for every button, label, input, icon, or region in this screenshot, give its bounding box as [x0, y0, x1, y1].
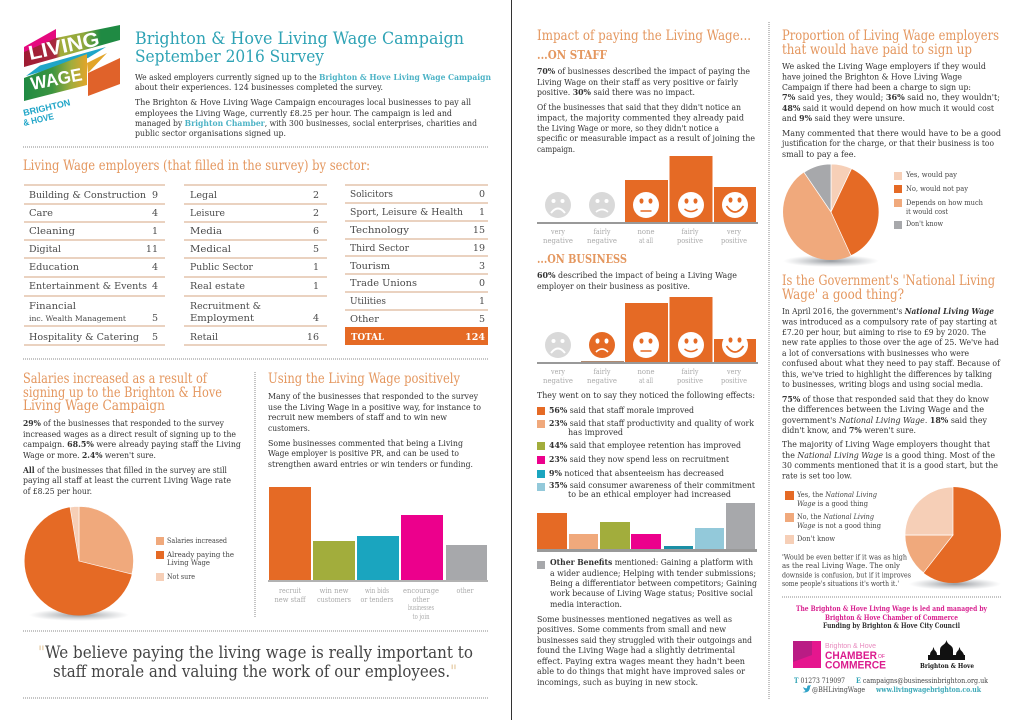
bar chart: impact on staff	[537, 156, 758, 245]
table: sectors column 2: 2	[313, 190, 319, 201]
text block: positive use body: customers.	[268, 423, 310, 433]
text block: national living wage body: In April 2016, the government's National Living Wage	[782, 306, 994, 316]
text block: other benefits: Other Benefits mentioned: Gaining a platform with	[550, 557, 754, 567]
text block: other benefits: work because of Living Wage status; Positive social	[550, 588, 753, 598]
table: sectors column 2: Media	[190, 226, 222, 237]
icon: fairly positive face, business	[678, 332, 704, 358]
legend: salaries pie: Salaries increased	[167, 536, 227, 545]
legend: effects list: 23% said they now spend less on recruitment	[549, 454, 730, 464]
heading: national living wage	[782, 273, 995, 303]
legend: effects list: to be an ethical employer had increased	[568, 489, 732, 499]
text block: proportion body: We asked the Living Wage employers if they would	[782, 61, 987, 71]
panel: national living wage	[782, 273, 1001, 590]
icon: very positive face	[722, 192, 748, 218]
text block: negatives	[537, 614, 753, 687]
icon: Chamber of Commerce logo: Brighton & Hove	[825, 643, 876, 650]
text block: national living wage body: was introduced as a compulsory rate of pay starting at	[782, 316, 998, 326]
text block: salaries body: of £8.25 per hour.	[23, 486, 92, 496]
text block: positive use body	[268, 391, 481, 469]
text block: positive use body: use the Living Wage in a positive way, for instance to	[268, 402, 481, 412]
text block: introduction: managed by Brighton Chamber, with 300 businesses, social enterprises, charities and	[135, 118, 478, 128]
legend: would pay: No, would not pay	[906, 184, 969, 193]
table: sectors column 1: 4	[152, 262, 158, 273]
heading: positive use: Using the Living Wage positively	[268, 371, 460, 387]
table: sectors column 2: 16	[307, 332, 319, 343]
icon: Brighton & Hove pavilion logo: Brighton & Hove	[920, 662, 974, 670]
table: sectors column 2: Medical	[190, 244, 231, 255]
icon: Living Wage logo	[22, 25, 120, 128]
text block: national living wage body: the National Living Wage is a good thing. Most of the	[782, 450, 995, 460]
text block: national living wage body: The majority of Living Wage employers thought that	[782, 439, 991, 449]
legend: effects list: 56% said that staff morale improved	[549, 405, 695, 415]
text block: positive use body: recruit new members of staff and to win new	[268, 412, 448, 422]
text block: national living wage body: to businesses, writing blogs and using social media.	[782, 379, 983, 389]
legend: national living wage: Wage is not a good thing	[797, 521, 881, 530]
legend: national living wage	[785, 490, 881, 544]
text block: national living wage body: new rate applies to those over the age of 25. We've had	[782, 337, 1000, 347]
icon: fairly negative face, business	[589, 332, 615, 358]
table: sectors column 2	[184, 185, 327, 345]
text block: on staff	[537, 66, 755, 154]
text block: salaries body: campaign. 68.5% were already paying staff the Living	[23, 439, 242, 449]
icon: Brighton & Hove pavilion logo	[920, 640, 974, 670]
bar chart: impact on staff: positive	[677, 236, 703, 245]
text block: proportion body: Many commented that there would have to be a good	[782, 128, 1002, 138]
text block: proportion body: and 9% said they were unsure.	[782, 113, 905, 123]
text block: on business: 60% described the impact of being a Living Wage	[537, 270, 737, 280]
heading: salaries: Salaries increased as a result of	[23, 371, 208, 387]
footer: credits: Brighton & Hove Chamber of Commerce	[825, 613, 958, 622]
table: sectors column 2: Recruitment &	[190, 301, 261, 312]
text block: positive use body: strengthen award entries or win tenders or funding.	[268, 459, 473, 469]
text block: proportion body: 7% said yes, they would; 36% said no, they wouldn't;	[782, 92, 1000, 102]
bar chart: impact on business: at all	[639, 376, 653, 385]
icon: very positive face, business	[722, 332, 748, 358]
panel: using the Living Wage positively	[268, 371, 488, 621]
text block: negatives: found the Living Wage had a slightly detrimental	[537, 645, 735, 655]
text block: on business: employer on their business as positive.	[537, 281, 690, 291]
text block: national living wage body	[782, 306, 1001, 480]
bar chart: effects	[537, 503, 757, 552]
text block: introduction: We asked employers currently signed up to the Brighton & Hove Living Wage Campaign	[135, 72, 491, 82]
panel: impact of paying the Living Wage	[537, 28, 758, 687]
callout: comment quote: some people's situations it's worth it.'	[782, 579, 899, 588]
text block: on staff: the Living Wage or more, so they didn't notice a	[537, 123, 719, 133]
heading: national living wage: Wage' a good thing?	[782, 287, 904, 303]
icon: Chamber of Commerce logo	[793, 641, 886, 672]
table: sectors column 3: 15	[473, 225, 485, 236]
text block: positive use body: Some businesses commented that being a Living	[268, 438, 464, 448]
table: sectors column 3: Trade Unions	[350, 278, 417, 289]
bar chart: positive use: other	[456, 586, 474, 595]
callout: comment quote: downside is confusion, but if it improves	[782, 570, 911, 580]
text block: on staff: Living Wage on their staff as very positive or fairly	[537, 77, 738, 87]
bar chart: positive use: other	[412, 595, 430, 604]
icon: Chamber of Commerce logo: OF	[878, 654, 885, 660]
text block: proportion body: Campaign if there had been a charge to sign up:	[782, 82, 971, 92]
table: sectors column 3: Technology	[350, 225, 410, 236]
icon: neutral face, business	[633, 332, 659, 358]
text block: negatives: Some businesses mentioned negatives as well as	[537, 614, 732, 624]
table: sectors column 3: Sport, Leisure & Health	[350, 207, 463, 218]
icon: Living Wage logo: WAGE	[29, 64, 84, 94]
text block: national living wage body: 30 comments mentioned that it is a good start, but the	[782, 460, 998, 470]
legend: national living wage: No, the National Living	[797, 512, 874, 521]
table: sectors column 3: Solicitors	[350, 189, 393, 200]
text block: positive use body: Wage employer is positive PR, and can be used to	[268, 448, 459, 458]
panel: salaries increased	[22, 371, 242, 621]
bar chart: impact on staff: at all	[639, 236, 653, 245]
table: sectors column 1: Building & Construction	[29, 190, 146, 201]
heading: salaries	[23, 371, 222, 414]
table: sectors column 1: 5	[152, 313, 158, 324]
text block: negatives: positives. Some comments from small and new	[537, 624, 727, 634]
icon: Living Wage logo: BRIGHTON	[22, 97, 71, 118]
text block: proportion body: small to pay a fee.	[782, 149, 856, 159]
table: sectors column 3: 124	[465, 332, 485, 343]
text block: negatives: incomings, such as buying in new stock.	[537, 677, 698, 687]
table: sectors column 2: 6	[313, 226, 319, 237]
bar chart: impact on business	[537, 297, 758, 385]
title: September 2016 Survey	[135, 47, 324, 67]
bar chart: impact on business: none	[638, 367, 655, 376]
legend: would pay: Yes, would pay	[905, 170, 958, 179]
text block: salaries body: Wage or more. 2.4% weren't sure.	[23, 450, 156, 460]
legend: effects list: 23% said that staff productivity and quality of work	[549, 418, 755, 428]
table: sectors column 2: 2	[313, 208, 319, 219]
icon: neutral face	[633, 192, 659, 218]
footer: contact details: E campaigns@businessinbrighton.org.uk	[856, 676, 988, 685]
icon: very negative face, business	[545, 332, 571, 358]
legend: effects list: 35% said consumer awareness of their commitment	[549, 480, 756, 490]
table: sectors column 1: 5	[152, 332, 158, 343]
bar chart: impact on staff: positive	[721, 236, 747, 245]
table: sectors column 3: Other	[350, 314, 379, 325]
table: sectors column 1: Education	[29, 262, 79, 273]
icon: fairly negative face	[589, 192, 615, 218]
text block: on staff: 70% of businesses described the impact of paying the	[537, 66, 750, 76]
text block: on staff: specific or measurable impact as a result of joining the	[537, 133, 755, 143]
bar chart: impact on staff: fairly	[682, 227, 699, 236]
text block: national living wage body: a lot of conversations with businesses who were	[782, 348, 969, 358]
bar chart: impact on staff: none	[638, 227, 655, 236]
legend: effects list: 9% noticed that absenteeism has decreased	[549, 468, 725, 478]
icon: Chamber of Commerce logo: COMMERCE	[825, 660, 886, 672]
panel: proportion that would have paid	[781, 28, 1002, 267]
text block: national living wage body: government's National Living Wage. 18% said they	[782, 415, 987, 425]
legend: would pay: Depends on how much	[906, 198, 983, 207]
text block: national living wage body: rate is set too low.	[782, 470, 852, 480]
text block: negatives: effect. Paying extra wages meant they hadn't been	[537, 656, 746, 666]
text block: introduction: employees the Living Wage, currently £8.25 per hour. The campaign is led and	[135, 108, 453, 118]
table: sectors column 3: 0	[479, 189, 485, 200]
text block: introduction: public sector organisations signed up.	[135, 128, 286, 138]
table: sectors column 2: Employment	[190, 313, 254, 324]
table: sectors column 2: Legal	[190, 190, 217, 201]
table: sectors column 1: 4	[152, 281, 158, 292]
heading: salaries: signing up to the Brighton & Hove	[23, 385, 222, 401]
table: sectors column 2: 5	[313, 244, 319, 255]
bar chart: impact on business: fairly	[594, 367, 611, 376]
bar chart: impact on staff: very	[550, 227, 566, 236]
table: sectors column 1: Financial	[29, 301, 76, 312]
callout: employer quote	[38, 643, 473, 682]
table: sectors column 3: 5	[479, 314, 485, 325]
bar chart: positive use	[268, 487, 488, 621]
text block: negatives: able to do things that might have improved sales or	[537, 666, 745, 676]
table: sectors column 1: Digital	[29, 244, 61, 255]
bar chart: impact on staff: very	[726, 227, 742, 236]
text block: on staff: positive. 30% said there was no impact.	[537, 87, 695, 97]
pie chart: would pay	[783, 164, 879, 267]
table: sectors column 2: 4	[313, 313, 319, 324]
text block: on staff: Of the businesses that said that they didn't notice an	[537, 102, 742, 112]
table: sectors column 3: 1	[479, 296, 485, 307]
text block: effects intro: They went on to say they noticed the following effects:	[537, 390, 755, 400]
bar chart: impact on business: positive	[677, 376, 703, 385]
text block: proportion body: 48% said it would depend on how much it would cost	[782, 103, 995, 113]
icon: Living Wage logo: & HOVE	[22, 111, 55, 128]
bar chart: positive use: customers	[317, 595, 351, 604]
table: sectors column 3: 3	[479, 261, 485, 272]
heading: salaries: Living Wage Campaign	[23, 398, 165, 414]
icon: fairly positive face	[678, 192, 704, 218]
footer: credits: Funding by Brighton & Hove City Council	[823, 621, 960, 630]
table: sectors column 2: 1	[313, 281, 319, 292]
table: sectors column 1: Hospitality & Catering	[29, 332, 139, 343]
text block: on staff: impact, the majority commented they already paid	[537, 112, 745, 122]
bar chart: positive use: businesses	[408, 603, 434, 612]
table: sectors column 2: 1	[313, 262, 319, 273]
text block: on staff: campaign.	[537, 144, 575, 154]
legend: national living wage: Yes, the National Living	[796, 490, 877, 499]
table: sectors column 1: 11	[146, 244, 158, 255]
text block: national living wage body: this, we've tried to highlight the differences by talking	[782, 369, 993, 379]
bar chart: impact on business: very	[726, 367, 742, 376]
heading: proportion	[782, 28, 999, 58]
footer: credits	[796, 604, 988, 630]
table: sectors column 3: Third Sector	[350, 243, 409, 254]
text block: national living wage body: confused about what they need to pay staff. Because of	[782, 358, 1001, 368]
legend: salaries pie: Not sure	[167, 572, 195, 581]
table: sectors column 2: Public Sector	[190, 262, 253, 273]
bar chart: impact on business: negative	[543, 376, 574, 385]
legend: would pay: it would cost	[906, 207, 948, 216]
pie chart: national living wage	[905, 487, 1001, 590]
text block: salaries body: 29% of the businesses that responded to the survey	[23, 418, 224, 428]
bar chart: impact on staff: negative	[587, 236, 618, 245]
bar chart: positive use: recruit	[279, 586, 301, 595]
legend: would pay: Don't know	[906, 219, 943, 228]
text block: on business	[537, 270, 737, 291]
bar chart: positive use: win new	[320, 586, 349, 595]
legend: would pay	[894, 170, 983, 229]
bar chart: impact on business: negative	[587, 376, 618, 385]
legend: salaries pie: Already paying the	[166, 550, 235, 559]
heading: sector table: Living Wage employers (that filled in the survey) by sector:	[23, 158, 370, 174]
text block: proportion body	[781, 61, 1002, 159]
text block: national living wage body: the differences between the Living Wage and the	[782, 404, 984, 414]
text block: positive use body: Many of the businesses that responded to the survey	[268, 391, 478, 401]
legend: salaries pie	[156, 536, 235, 581]
title	[135, 29, 464, 67]
table: sectors column 1: Entertainment & Events	[29, 281, 147, 292]
table: sectors column 1: inc. Wealth Management	[29, 314, 126, 323]
table: sectors column 1: 1	[152, 226, 158, 237]
legend: national living wage: Don't know	[797, 534, 836, 543]
text block: national living wage body: didn't know, and 7% weren't sure.	[782, 425, 916, 435]
title: Brighton & Hove Living Wage Campaign	[135, 29, 464, 49]
text block: salaries body: All of the businesses that filled in the survey are still	[22, 465, 227, 475]
footer: contact details	[794, 676, 988, 694]
text block: other benefits	[537, 557, 758, 609]
text block: proportion body: have joined the Brighton & Hove Living Wage	[782, 72, 962, 82]
callout: comment quote	[782, 552, 911, 588]
text block: salaries body: increased wages as a direct result of signing up to the	[23, 429, 236, 439]
bar chart: positive use: to join	[412, 612, 430, 621]
bar chart: impact on business: fairly	[682, 367, 699, 376]
table: sectors column 1: Care	[29, 208, 53, 219]
bar chart: positive use: new staff	[274, 595, 306, 604]
legend: effects list	[537, 405, 756, 499]
table: sectors column 1: 4	[152, 208, 158, 219]
legend: effects list: 44% said that employee retention has improved	[549, 440, 742, 450]
bar chart: positive use: encourage	[403, 586, 439, 595]
icon: Living Wage logo: LIVING	[26, 28, 101, 65]
table: sectors column 3: Tourism	[350, 261, 390, 272]
footer: contact details: www.livingwagebrighton.co.uk	[875, 685, 982, 694]
footer: contact details: @BHLivingWage	[812, 685, 865, 694]
text block: introduction: The Brighton & Hove Living Wage Campaign encourages local businesses to pay all	[135, 97, 471, 107]
text block: proportion body: justification for the charge, or that their business is too	[781, 138, 994, 148]
icon: twitter bird	[802, 685, 811, 692]
callout: employer quote: staff morale and valuing the work of our employees."	[53, 662, 457, 682]
bar chart: positive use: win bids	[365, 586, 389, 595]
legend: effects list: has improved	[568, 427, 624, 437]
legend: national living wage: Wage is a good thing	[797, 499, 868, 508]
icon: very negative face	[545, 192, 571, 218]
table: sectors column 3: 19	[473, 243, 485, 254]
table: sectors column 3: 0	[479, 278, 485, 289]
text block: other benefits: media interaction.	[550, 599, 622, 609]
text block: introduction	[135, 72, 491, 138]
text block: other benefits: Being a differentiator between competitors; Gaining	[550, 578, 758, 588]
text block: national living wage body: 75% of those that responded said that they do know	[782, 394, 990, 404]
bar chart: impact on staff: negative	[543, 236, 574, 245]
table: sectors column 2: Retail	[190, 332, 218, 343]
footer: contact details: T 01273 719097	[794, 676, 845, 685]
heading: on staff: ...ON STAFF	[537, 48, 607, 62]
text block: national living wage body: £7.20 per hour, but aiming to rise to £9 by 2020. The	[782, 327, 986, 337]
bar chart: impact on business: positive	[721, 376, 747, 385]
icon: Chamber of Commerce logo: CHAMBER	[825, 650, 877, 662]
pie chart: salaries	[24, 506, 134, 621]
text block: salaries body: paying all staff at least the current Living Wage rate	[23, 475, 231, 485]
text block: other benefits: a wider audience; Helping with tender submissions;	[550, 568, 756, 578]
callout: comment quote: as the real Living Wage. The only	[782, 561, 901, 570]
callout: employer quote: "We believe paying the living wage is really important to	[38, 643, 473, 663]
table: sectors column 3: TOTAL	[351, 332, 384, 343]
table: sectors column 3: 1	[479, 207, 485, 218]
table: sectors column 3	[345, 185, 488, 345]
table: sectors column 2: Leisure	[190, 208, 225, 219]
text block: salaries body	[22, 418, 242, 496]
bar chart: impact on business: very	[550, 367, 566, 376]
table: sectors column 1: 9	[152, 190, 158, 201]
heading: on business: ...ON BUSINESS	[537, 252, 627, 266]
legend: salaries pie: Living Wage	[167, 558, 211, 567]
table: sectors column 3: Utilities	[350, 296, 386, 307]
table: sectors column 2: Real estate	[190, 281, 245, 292]
bar chart: positive use: or tenders	[360, 595, 394, 604]
text block: negatives: businesses said they struggled with their outgoings and	[537, 635, 753, 645]
text block: introduction: about their experiences. 124 businesses completed the survey.	[135, 82, 383, 92]
table: sectors column 1: Cleaning	[29, 226, 75, 237]
callout: comment quote: 'Would be even better if it was as high	[782, 552, 907, 562]
bar chart: impact on staff: fairly	[594, 227, 611, 236]
heading: impact: Impact of paying the Living Wage...	[537, 28, 751, 44]
heading: proportion: that would have paid to sign up	[782, 42, 972, 58]
table: sectors column 1	[24, 185, 165, 345]
